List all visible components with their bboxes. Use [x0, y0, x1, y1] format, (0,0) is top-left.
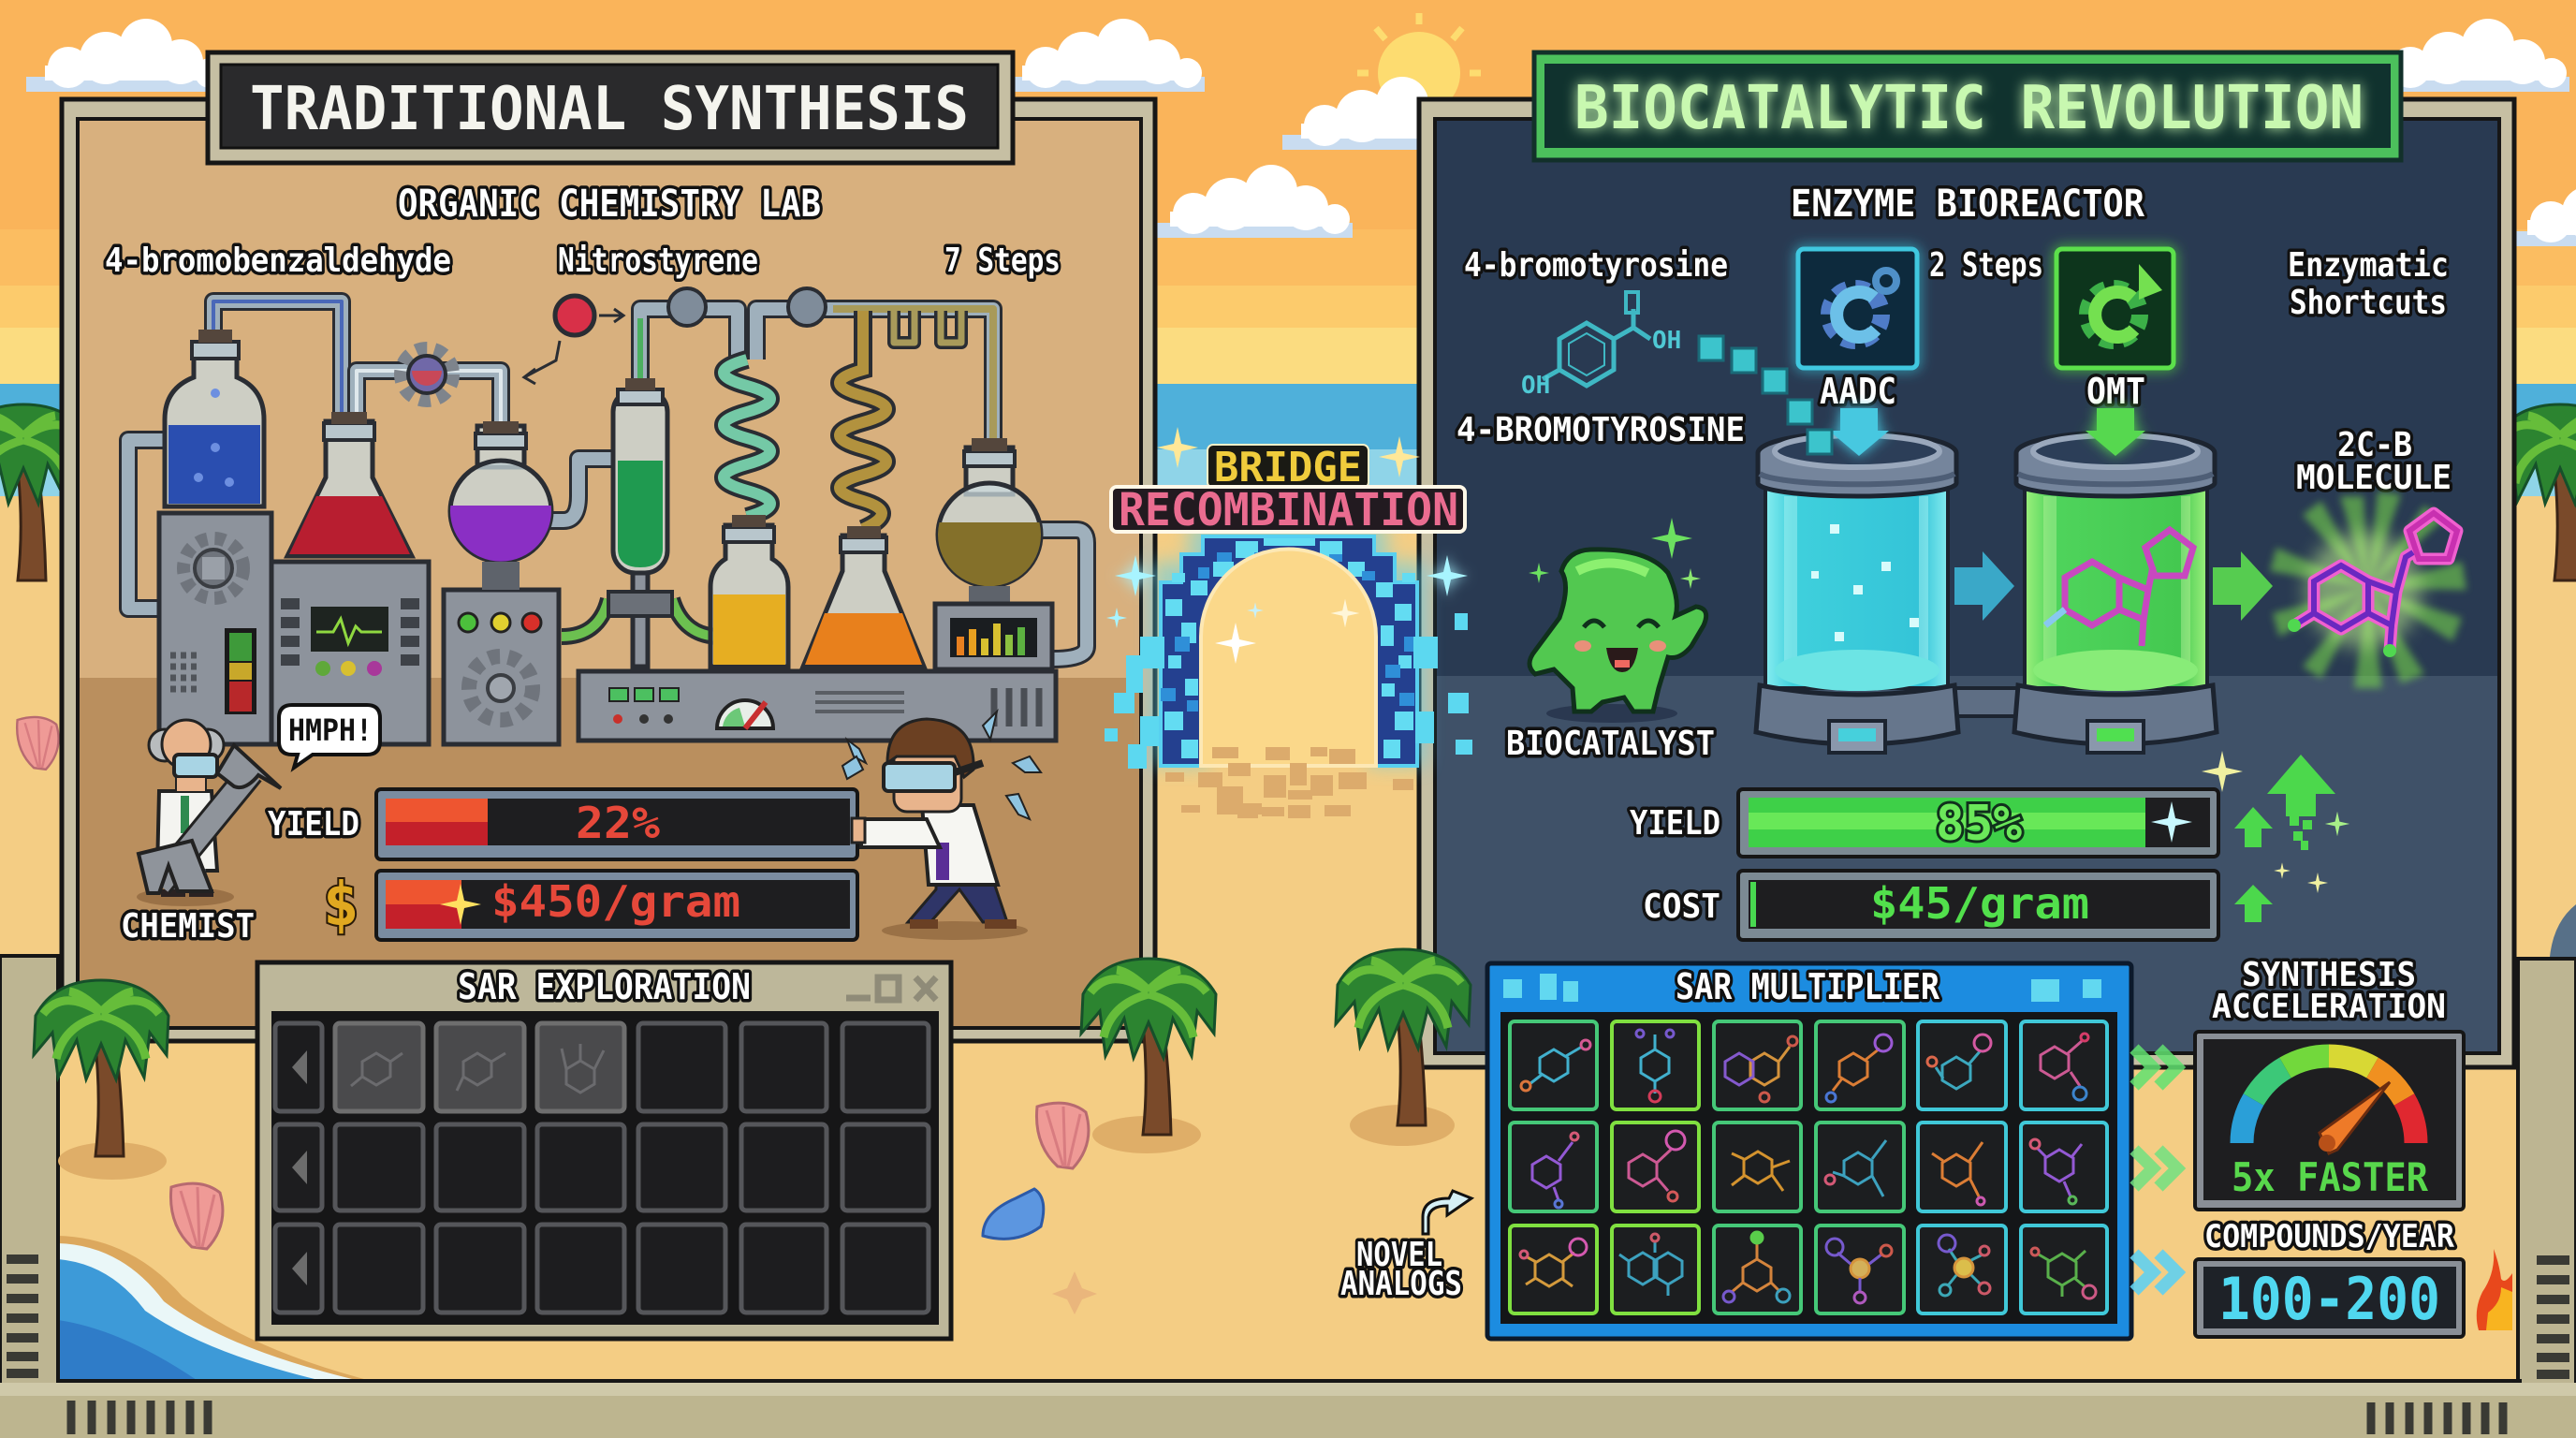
reactor: cyan [1756, 433, 2036, 753]
label: bridge: BRIDGE [1214, 444, 1362, 492]
analog cell 7 [1510, 1123, 1597, 1211]
label: 2 steps: 2 Steps [1929, 246, 2043, 285]
analog cell 1 [1510, 1021, 1597, 1109]
analog cell 17 [1918, 1225, 2006, 1313]
flask: blue bottle [165, 330, 264, 506]
side tabs [275, 1023, 322, 1313]
arrow: into AADC reactor [1829, 408, 1889, 456]
label: yield: YIELD [1630, 804, 1720, 843]
label: 2C-B molecule [2296, 426, 2452, 497]
label: novel analogs: ANALOGS [1340, 1265, 1462, 1303]
nitrostyrene balloon marker [524, 296, 623, 384]
flask: yellow [710, 515, 788, 667]
cost bar: $450/gram [491, 876, 740, 927]
machine with lights [444, 590, 559, 744]
label: synthesis acceleration [2212, 956, 2446, 1026]
pink shell on far left beach [17, 717, 59, 770]
panel: biocatalytic revolution [1419, 99, 2514, 1067]
analog cell 10 [1816, 1123, 1904, 1211]
cost bar [1738, 871, 2218, 940]
machine with monitor [271, 562, 429, 744]
heading: traditional synthesis [208, 52, 1013, 163]
label: enzymatic shortcuts [2288, 246, 2449, 322]
flask: red conical [287, 412, 412, 556]
analog cell 12 [2021, 1123, 2107, 1211]
label: chemist: CHEMIST [121, 907, 255, 946]
cost bar [376, 871, 857, 940]
yield bar [1738, 789, 2218, 857]
sun [1357, 13, 1481, 114]
heading: organic chemistry lab: ORGANIC CHEMISTRY LAB [398, 183, 821, 226]
label: 4-bromotyrosine caps: 4-BROMOTYROSINE [1456, 411, 1745, 449]
panel: SAR multiplier [1487, 963, 2131, 1339]
sparkles [2202, 751, 2349, 893]
control console [578, 671, 1056, 741]
icon: flame [2477, 1249, 2512, 1330]
label: novel analogs [1340, 1236, 1462, 1303]
heading: SAR multiplier: SAR MULTIPLIER [1676, 966, 1939, 1007]
header decoration [1503, 974, 2101, 1002]
valve gear [401, 348, 453, 401]
panel frame [1419, 99, 2514, 1067]
analog cell 15 [1714, 1225, 1801, 1313]
round valves [668, 288, 826, 326]
arrow: green reactor to product [2213, 551, 2273, 621]
label: enzymatic shortcuts: Shortcuts [2290, 284, 2447, 322]
enzyme tile: AADC [1798, 249, 1917, 368]
analog cell 18 [2021, 1225, 2107, 1313]
empty slots [335, 1023, 929, 1313]
label: 4-bromotyrosine: 4-bromotyrosine [1464, 246, 1728, 285]
cost bar: $45/gram [1870, 878, 2089, 929]
analog cell 4 [1816, 1021, 1904, 1109]
label: novel analogs: NOVEL [1356, 1236, 1442, 1274]
analog cell 11 [1918, 1123, 2006, 1211]
analog cell 14 [1612, 1225, 1699, 1313]
yield bar [376, 789, 857, 859]
path stones [1165, 747, 1413, 818]
heading: SAR exploration: SAR EXPLORATION [458, 966, 751, 1007]
icon: tyrosine molecule [1521, 292, 1681, 400]
arrows: improvement [2234, 755, 2335, 922]
icon: curved arrow [1423, 1191, 1471, 1234]
pipes [128, 301, 1087, 659]
green coil [724, 360, 770, 517]
arrow: into OMT reactor [2086, 408, 2145, 456]
label: compounds per year: COMPOUNDS/YEAR [2204, 1218, 2454, 1255]
analog cell 2 [1612, 1021, 1699, 1109]
heading: biocatalytic revolution [1534, 52, 2401, 160]
bar chart monitor [935, 604, 1052, 669]
portal arch [1105, 536, 1472, 769]
panel frame [62, 99, 1155, 1041]
icon: dollar sign: $ [323, 871, 359, 940]
label: 2C-B molecule: 2C-B [2337, 426, 2412, 464]
character: scientist pushing [842, 712, 1041, 940]
heading: enzyme bioreactor: ENZYME BIOREACTOR [1791, 183, 2145, 226]
label: 4-bromobenzaldehyde: 4-bromobenzaldehyde [105, 242, 451, 280]
counter: 100-200: 100-200 [2218, 1265, 2440, 1333]
icon: tyrosine molecule: OH [1521, 372, 1550, 400]
sparkles [1106, 427, 1468, 664]
analog cell 5 [1918, 1021, 2006, 1109]
flask: orange [803, 526, 924, 667]
label: OMT: OMT [2086, 371, 2145, 412]
flask: purple round [450, 421, 551, 590]
analog cell 3 [1714, 1021, 1801, 1109]
window controls [846, 977, 936, 1000]
yield bar: 85% [1936, 796, 2022, 852]
analog cell 8 [1612, 1123, 1699, 1211]
label: nitrostyrene: Nitrostyrene [558, 242, 758, 280]
beach foreground: sea shore and shells [58, 1103, 1097, 1382]
tube: green column [608, 378, 672, 667]
side chrome and bottom frame [0, 904, 2576, 1438]
palm trees [34, 949, 1471, 1180]
amber coil [840, 311, 886, 529]
arrow: cyan to green reactor [1954, 551, 2014, 621]
yield bar: 22% [576, 798, 660, 848]
background palms [0, 404, 2576, 580]
enzyme tile: OMT [2056, 249, 2174, 368]
label: enzymatic shortcuts: Enzymatic [2288, 246, 2449, 285]
reactor: green [2014, 433, 2217, 753]
square entering reactor [1808, 430, 1832, 454]
speech bubble [279, 705, 380, 768]
label: synthesis acceleration: SYNTHESIS [2242, 956, 2416, 994]
gauge: 5x faster: 5x FASTER [2232, 1154, 2429, 1200]
analog cell 6 [2021, 1021, 2107, 1109]
heading: biocatalytic revolution: BIOCATALYTIC REVOLUTION [1574, 74, 2364, 143]
label: yield: YIELD [268, 805, 359, 844]
icon: tyrosine molecule: OH [1652, 327, 1681, 355]
arrows: multiplier to metrics [2134, 1049, 2177, 1291]
lab apparatus [128, 288, 1087, 744]
panel: SAR exploration [257, 962, 951, 1339]
character: biocatalyst blob [1529, 518, 1706, 723]
analog cell 9 [1714, 1123, 1801, 1211]
flask: brown round [938, 438, 1041, 605]
character: chemist with wrench [137, 720, 281, 906]
speech bubble: HMPH! [288, 712, 373, 748]
analog cell 16 [1816, 1225, 1904, 1313]
label: AADC: AADC [1820, 371, 1896, 412]
gauge: 5x faster [2195, 1032, 2464, 1210]
clouds [26, 19, 2576, 246]
label: cost: COST [1643, 888, 1720, 926]
heading: traditional synthesis: TRADITIONAL SYNTHESIS [250, 75, 969, 144]
filled faded slots [335, 1023, 624, 1111]
machine with gear [159, 513, 271, 744]
icon: glowing 2C-B molecule [2270, 492, 2466, 688]
label: biocatalyst: BIOCATALYST [1506, 725, 1715, 763]
label: recombination: RECOMBINATION [1119, 484, 1458, 536]
data squares path [1699, 336, 1812, 424]
panel: traditional synthesis [62, 99, 1155, 1041]
analog cell 13 [1510, 1225, 1597, 1313]
center portal: bridge recombination [1105, 427, 1472, 818]
label: 2C-B molecule: MOLECULE [2296, 459, 2452, 497]
label: 7 steps: 7 Steps [944, 242, 1061, 280]
label: synthesis acceleration: ACCELERATION [2212, 988, 2446, 1026]
